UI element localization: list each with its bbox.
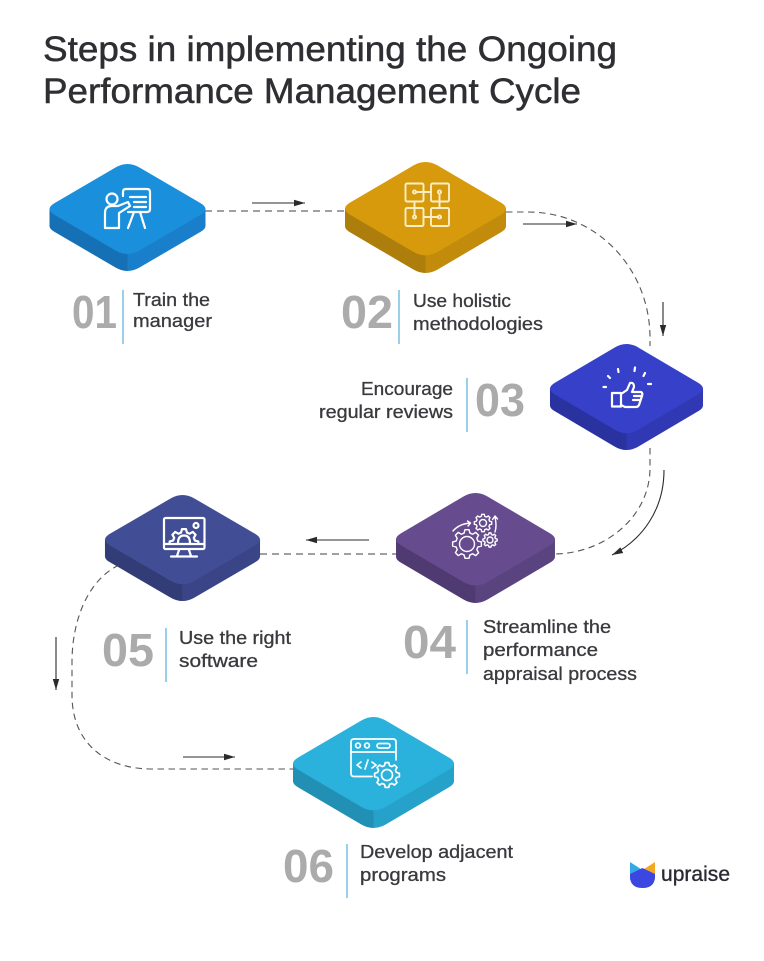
icon: presenter at board xyxy=(105,189,150,228)
arrow: step 5 to 6 vertical xyxy=(55,637,57,690)
step 6 tile xyxy=(293,717,454,828)
step 1 label xyxy=(72,286,212,344)
icon: gears with arrows xyxy=(453,514,498,558)
step 5 label: software xyxy=(179,651,258,671)
step 4 tile xyxy=(396,493,555,603)
step 4 label: Streamline the xyxy=(483,617,611,637)
step 4 label: performance xyxy=(483,640,598,660)
dashed connector: step 3 to 4 xyxy=(555,448,650,554)
step 1 label: 01 xyxy=(72,286,117,338)
step 6 label xyxy=(283,840,513,898)
title: Steps in implementing the Ongoing xyxy=(43,30,617,69)
step 1 label: Train the xyxy=(133,290,210,310)
step 3 tile xyxy=(550,344,703,450)
step 4 label: 04 xyxy=(403,616,456,668)
step 2 label xyxy=(341,286,543,344)
dashed connector: step 5 to 6 xyxy=(72,565,293,769)
step 5 label: 05 xyxy=(102,624,154,676)
step 1 tile xyxy=(50,164,206,271)
step 6 label: Develop adjacent xyxy=(360,842,513,862)
icon: thumbs up with rays xyxy=(604,368,651,407)
arrow: step 5 to 6 horizontal xyxy=(183,756,235,758)
step 5 label: Use the right xyxy=(179,628,291,648)
step 3 label: regular reviews xyxy=(319,402,453,422)
arrow: step 1 to 2 xyxy=(252,202,305,204)
step 6 label: programs xyxy=(360,865,446,885)
step 1 label: manager xyxy=(133,311,212,331)
step 5 label xyxy=(102,624,291,682)
step 3 label xyxy=(319,374,525,432)
arrow: step 2 to 3 vertical xyxy=(662,302,664,336)
title xyxy=(43,30,617,111)
logo: upraise xyxy=(630,862,730,888)
step 4 label: appraisal process xyxy=(483,664,637,684)
step 2 label: methodologies xyxy=(413,314,543,334)
step 3 label: 03 xyxy=(475,374,525,426)
dashed connector: step 2 to 3 xyxy=(506,212,650,346)
step 2 tile xyxy=(345,162,506,273)
step 5 tile xyxy=(105,495,260,601)
title: Performance Management Cycle xyxy=(43,72,581,111)
icon: monitor with gear xyxy=(164,518,204,558)
step 2 label: 02 xyxy=(341,286,393,338)
icon: code window with gear xyxy=(351,739,399,787)
step 4 label xyxy=(403,616,637,684)
dashed connector: step 1 to 2 xyxy=(205,210,345,212)
dashed connector: step 4 to 5 xyxy=(260,553,396,555)
arrow: step 4 to 5 xyxy=(306,539,369,541)
arrow: step 3 to 4 curved xyxy=(612,470,664,555)
icon: connected process boxes xyxy=(406,184,449,226)
logo: upraise: upraise xyxy=(661,863,730,886)
step 6 label: 06 xyxy=(283,840,334,892)
arrow: step 2 to 3 horizontal xyxy=(523,223,577,225)
step 2 label: Use holistic xyxy=(413,291,511,311)
step 3 label: Encourage xyxy=(361,379,453,399)
